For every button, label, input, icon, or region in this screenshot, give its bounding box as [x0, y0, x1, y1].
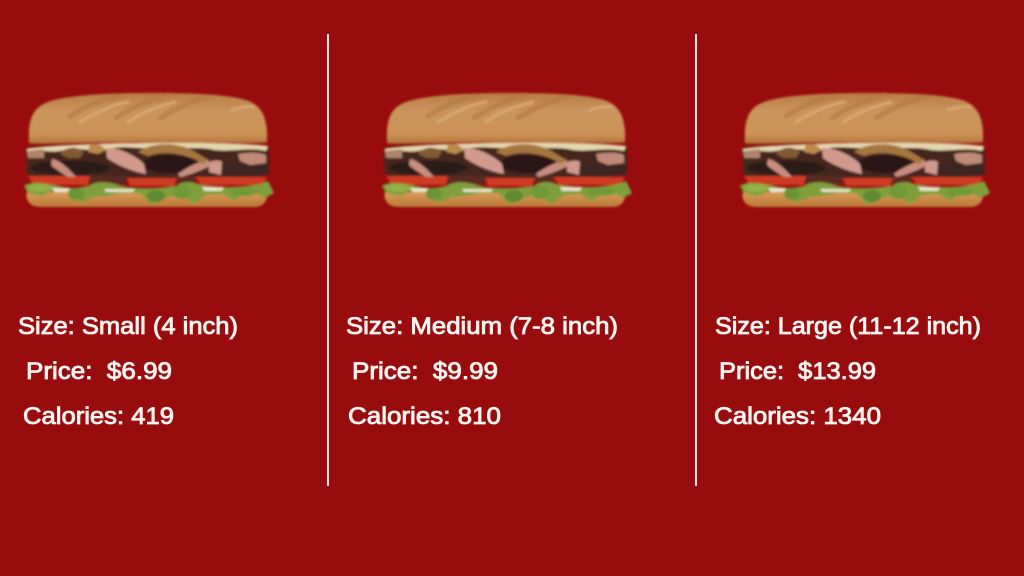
icon: medium sandwich image [382, 93, 632, 207]
text: large size, price and calories: Size: Large (11-12 inch) [715, 313, 981, 340]
icon: small sandwich image [24, 93, 274, 207]
text: small size, price and calories [18, 313, 238, 430]
text: medium size, price and calories [346, 313, 618, 430]
text: medium size, price and calories: Price: $9.99 [352, 358, 498, 385]
text: small size, price and calories: Calories: 419 [23, 403, 174, 430]
icon: large sandwich image [740, 93, 990, 207]
text: medium size, price and calories: Calories: 810 [348, 403, 501, 430]
text: small size, price and calories: Size: Small (4 inch) [18, 313, 238, 340]
divider: left vertical line [327, 34, 329, 486]
text: medium size, price and calories: Size: Medium (7-8 inch) [346, 313, 618, 340]
text: large size, price and calories: Price: $13.99 [719, 358, 876, 385]
panel: small sandwich [18, 93, 274, 430]
divider: right vertical line [695, 34, 697, 486]
text: small size, price and calories: Price: $6.99 [26, 358, 172, 385]
panel: large sandwich [714, 93, 990, 430]
text: large size, price and calories: Calories: 1340 [714, 403, 881, 430]
panel: medium sandwich [346, 93, 632, 430]
text: large size, price and calories [714, 313, 981, 430]
